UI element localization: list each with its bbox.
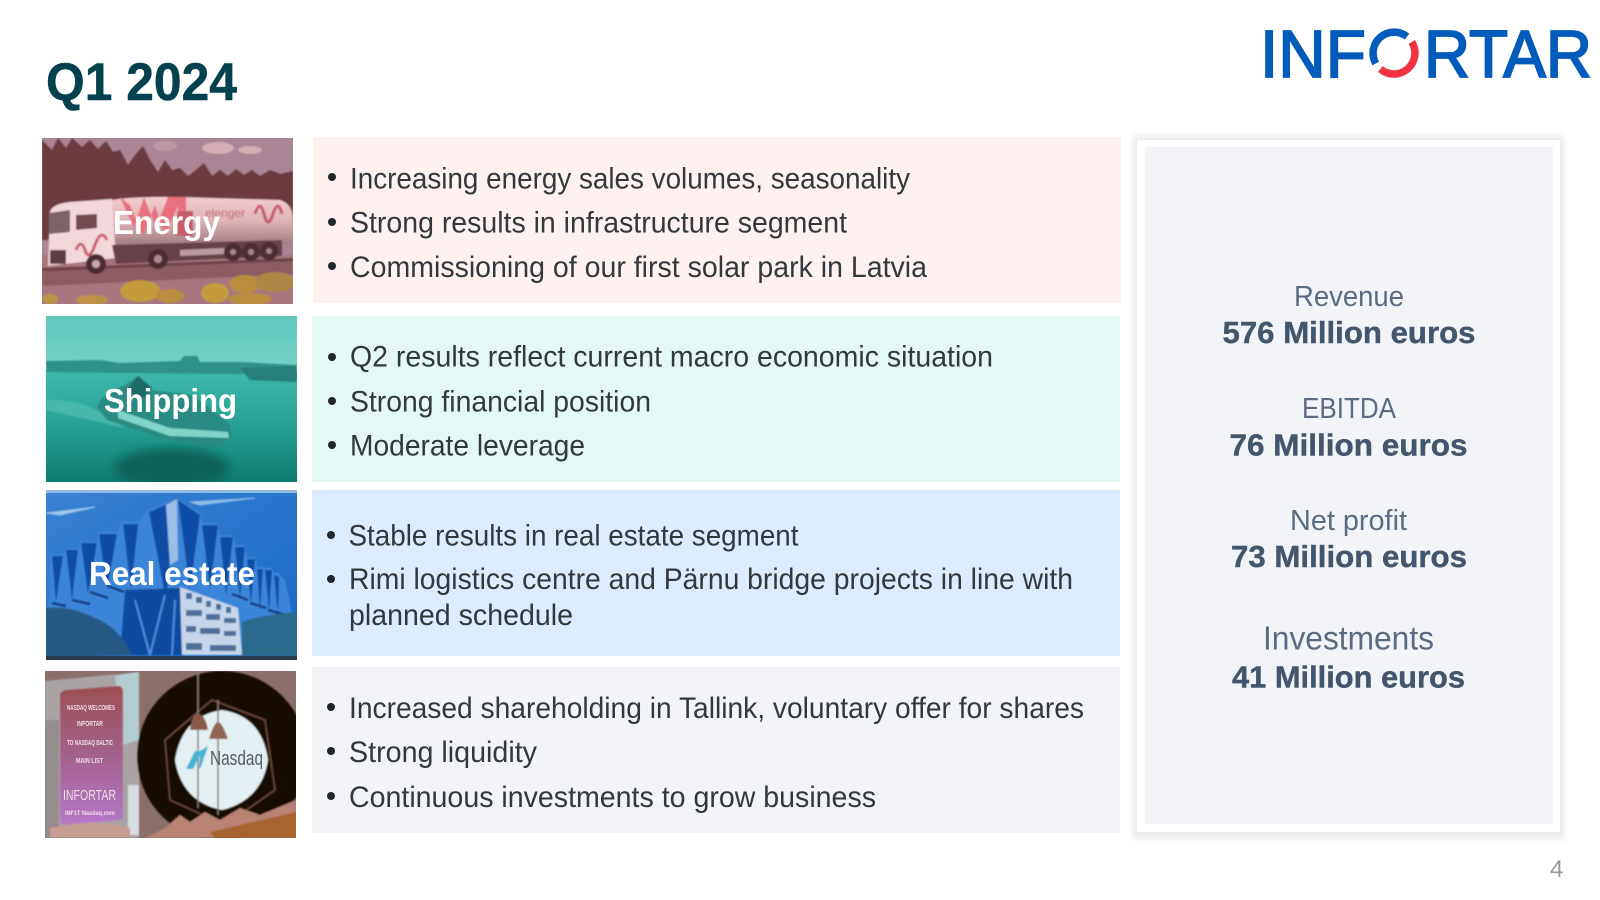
panel: energy: Commissioning of our first solar park in Latvia xyxy=(350,251,927,284)
billboard text: MAIN LIST xyxy=(76,758,104,765)
panel: holding: Continuous investments to grow business xyxy=(349,781,876,814)
figure: EBITDA: EBITDA xyxy=(1302,393,1397,425)
panel: energy: Strong results in infrastructure segment xyxy=(350,206,848,240)
figure: revenue xyxy=(1222,281,1476,350)
panel: energy: Increasing energy sales volumes, seasonality xyxy=(350,162,910,196)
figure: revenue: Revenue xyxy=(1294,281,1404,313)
panel: key figures xyxy=(1133,136,1564,839)
label: Energy: Energy xyxy=(113,204,221,241)
photo: energy truck xyxy=(42,138,295,305)
figure: investments: 41 Million euros xyxy=(1232,660,1465,694)
billboard text: INF1T Nasdaq.com xyxy=(65,811,115,817)
panel: holding xyxy=(312,667,1120,833)
panel: holding: Increased shareholding in Tallink, voluntary offer for shares xyxy=(349,692,1084,725)
figure: investments: Investments xyxy=(1263,620,1434,656)
panel: energy xyxy=(313,137,1121,303)
page number: 4 xyxy=(1550,856,1563,883)
photo: real estate xyxy=(46,490,297,660)
billboard text: INFORTAR xyxy=(77,721,103,728)
panel: real estate: Stable results in real estate segment xyxy=(348,520,799,552)
photo: Nasdaq bell xyxy=(45,671,307,841)
figure: investments xyxy=(1232,620,1465,694)
panel: shipping: Moderate leverage xyxy=(350,430,585,462)
figure: EBITDA xyxy=(1230,393,1468,462)
Nasdaq logo text: Nasdaq xyxy=(210,748,263,770)
panel: shipping: Strong financial position xyxy=(350,386,651,418)
title: Q1 2024 xyxy=(46,53,237,112)
panel: shipping: Q2 results reflect current macro economic situation xyxy=(350,340,993,374)
panel: real estate: Rimi logistics centre and Pärnu bridge projects in line with xyxy=(349,563,1073,596)
logo: Infortar: RTAR xyxy=(1424,17,1592,92)
photo: energy truck: elenger xyxy=(205,206,245,220)
billboard text: TO NASDAQ BALTIC xyxy=(67,740,113,747)
figure: net profit xyxy=(1231,505,1467,574)
panel: real estate xyxy=(312,490,1120,656)
panel: shipping xyxy=(312,316,1120,482)
billboard text xyxy=(63,705,116,817)
billboard text: NASDAQ WELCOMES xyxy=(67,705,115,712)
photo: shipping xyxy=(46,316,297,488)
figure: net profit: Net profit xyxy=(1290,505,1407,537)
billboard text: INFORTAR xyxy=(63,787,116,804)
label: Shipping: Shipping xyxy=(104,382,237,419)
figure: revenue: 576 Million euros xyxy=(1222,315,1476,350)
panel: real estate: planned schedule xyxy=(349,599,573,632)
figure: net profit: 73 Million euros xyxy=(1231,539,1467,574)
logo: Infortar xyxy=(1260,17,1592,92)
label: Real estate: Real estate xyxy=(89,555,255,592)
logo: Infortar: INF xyxy=(1260,17,1366,92)
panel: holding: Strong liquidity xyxy=(349,736,537,769)
figure: EBITDA: 76 Million euros xyxy=(1230,428,1468,462)
